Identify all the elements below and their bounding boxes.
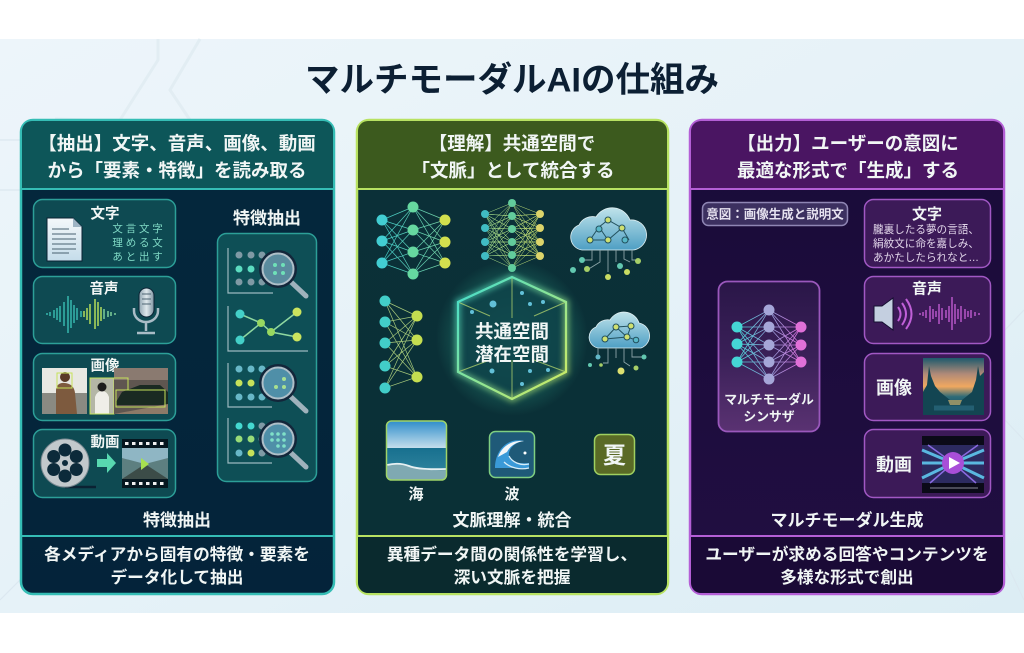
image card — [34, 354, 176, 420]
label: wave: 波 — [504, 485, 520, 503]
feature chart card — [218, 234, 316, 482]
chart: line graph — [228, 306, 308, 351]
panel footer — [357, 536, 668, 593]
output card: text: 朧裏したる夢の言語、 — [873, 223, 979, 236]
output card: text: 絹紋文に命を嘉しみ、 — [873, 237, 979, 250]
intent chip — [702, 202, 848, 226]
latent space hexagon — [436, 260, 588, 416]
video card — [34, 430, 176, 498]
panel header band — [690, 121, 1004, 189]
feature extraction label: 特徴抽出 — [233, 209, 301, 228]
panel header band — [21, 121, 334, 189]
label: sea: 海 — [408, 486, 424, 503]
latent space hexagon: 潜在空間 — [475, 344, 549, 365]
latent space hexagon: 共通空間 — [475, 321, 549, 342]
panel caption: 文脈理解・統合 — [452, 511, 572, 530]
tile: summer — [594, 434, 634, 474]
panel footer: 多様な形式で創出 — [780, 567, 914, 587]
synthesizer card: シンサザ — [743, 409, 795, 424]
panel caption: 特徴抽出 — [143, 511, 211, 530]
neural network 3 — [380, 296, 422, 394]
panel caption: マルチモーダル生成 — [770, 510, 924, 530]
panel footer — [21, 536, 334, 587]
panel header band: 最適な形式で「生成」する — [737, 160, 959, 181]
chart: dot grid with magnifier 1 — [228, 248, 306, 296]
chart: dot grid with magnifier 2 — [228, 363, 306, 411]
panel header band: 【理解】共通空間で — [429, 133, 595, 154]
output card: image — [864, 354, 990, 420]
video card: 動画 — [90, 434, 120, 451]
panel footer: 各メディアから固有の特徴・要素を — [44, 544, 310, 564]
output card: audio — [864, 276, 990, 344]
panel footer: データ化して抽出 — [110, 567, 244, 587]
text card: 文字 — [90, 204, 120, 222]
image tile: sea — [386, 421, 446, 480]
text card: 文言文字 — [112, 222, 166, 235]
output card: text: 文字 — [912, 205, 942, 223]
synthesizer card — [718, 282, 820, 432]
neural network 2 — [481, 199, 544, 272]
audio card: 音声 — [90, 280, 118, 298]
panel frame — [357, 120, 668, 594]
output card: audio: 音声 — [912, 280, 942, 298]
panel header band — [357, 121, 668, 189]
tile: summer: 夏 — [603, 442, 626, 468]
output card: image: 画像 — [876, 378, 912, 398]
panel: understanding — [357, 120, 668, 594]
title: マルチモーダルAIの仕組み — [305, 60, 719, 100]
panel: output — [690, 120, 1004, 594]
audio card — [34, 276, 176, 344]
neural network 1 — [376, 202, 450, 280]
chart: dot grid with magnifier 3 — [228, 418, 306, 467]
cloud network 1 — [570, 208, 647, 280]
panel header band: 「文脈」として統合する — [412, 160, 614, 181]
panel footer: 異種データ間の関係性を学習し、 — [387, 544, 637, 564]
panel header band: から「要素・特徴」を読み取る — [47, 160, 307, 181]
output card: video: 動画 — [876, 455, 912, 475]
panel header band: 【出力】ユーザーの意図に — [737, 133, 959, 154]
synthesizer card: マルチモーダル — [724, 392, 814, 407]
panel footer — [690, 536, 1004, 593]
output card: text: あかたしたられなと… — [873, 252, 979, 264]
text card: 理める文 — [112, 236, 166, 249]
output card: video — [864, 430, 990, 498]
image card: 画像 — [90, 358, 120, 374]
panel header band: 【抽出】文字、音声、画像、動画 — [38, 133, 316, 154]
panel footer: 深い文脈を把握 — [454, 568, 571, 587]
icon: wave — [490, 432, 534, 478]
cloud network 2 — [588, 312, 650, 374]
panel frame — [21, 120, 334, 594]
panel footer: ユーザーが求める回答やコンテンツを — [705, 544, 989, 564]
output card: text — [864, 200, 990, 268]
text card — [34, 200, 176, 268]
panel frame — [690, 120, 1004, 594]
neural network 4 — [732, 304, 806, 384]
panel: extraction — [21, 120, 334, 594]
intent chip: 意図：画像生成と説明文 — [706, 206, 844, 222]
text card: あと出す — [112, 251, 166, 263]
